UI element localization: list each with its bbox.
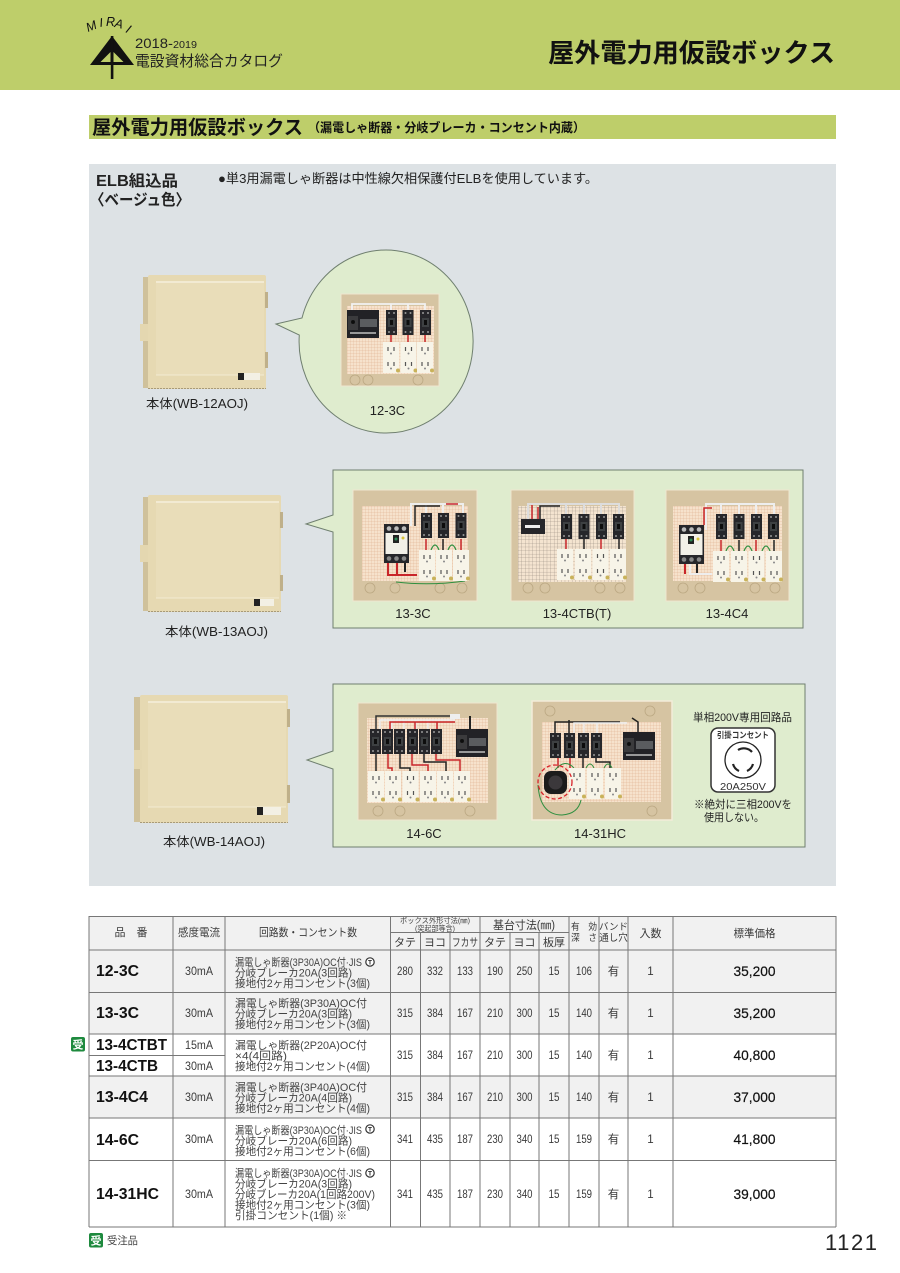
row: 13-4CTBT and 13-4CTB: 300 bbox=[516, 1050, 532, 1062]
row: 13-3C: 有 bbox=[608, 1006, 619, 1020]
icon: made-to-order mark: 受 bbox=[72, 1038, 84, 1052]
row: 14-31HC: 1 bbox=[647, 1189, 654, 1201]
row: 13-4C4: 13-4C4 bbox=[96, 1089, 148, 1106]
photo: 13-4C4 bbox=[666, 490, 789, 601]
row: 14-6C: 有 bbox=[608, 1132, 619, 1146]
row: 13-4CTBT and 13-4CTB: 15mA bbox=[185, 1040, 213, 1052]
row: 13-4CTBT and 13-4CTB: 接地付2ヶ用コンセント(4個) bbox=[235, 1060, 370, 1073]
row: 13-4CTBT and 13-4CTB: 210 bbox=[487, 1050, 503, 1062]
row: 13-4C4: 30mA bbox=[185, 1092, 213, 1104]
table header: 板厚 bbox=[543, 935, 565, 949]
body photo: WB-13AOJ bbox=[140, 495, 283, 612]
row: 14-6C: 分岐ブレーカ20A(6回路) bbox=[235, 1134, 352, 1148]
row: 13-4CTBT and 13-4CTB: 有 bbox=[608, 1048, 619, 1062]
warning note bbox=[694, 797, 792, 824]
panel: product area bbox=[89, 164, 836, 886]
table header: バンド bbox=[599, 922, 628, 933]
logo: MIRAI: MIRAI bbox=[84, 15, 134, 37]
row: 14-6C: 41,800 bbox=[734, 1131, 776, 1147]
table header bbox=[114, 915, 776, 949]
table header: 感度電流 bbox=[178, 925, 220, 939]
table header: タテ bbox=[484, 936, 506, 949]
row: 13-3C: 分岐ブレーカ20A(3回路) bbox=[235, 1006, 352, 1020]
row: 14-6C: 漏電しゃ断器(3P30A)OC付·JIS bbox=[235, 1124, 362, 1137]
table header: 通し穴 bbox=[599, 933, 628, 944]
row: 14-31HC: 341 bbox=[397, 1189, 413, 1201]
model label: 12-3C bbox=[370, 403, 405, 418]
row: 14-31HC: 435 bbox=[427, 1189, 443, 1201]
row shading bbox=[89, 916, 836, 1227]
row: 13-3C bbox=[96, 997, 776, 1031]
table header: 回路数・コンセント数 bbox=[259, 926, 357, 939]
photo: 12-3C bbox=[341, 294, 439, 386]
row: 13-4C4: 37,000 bbox=[734, 1089, 776, 1105]
panel heading: 〈ベージュ色〉 bbox=[90, 190, 190, 209]
icon: twist-lock outlet: 引掛コンセント bbox=[717, 730, 769, 740]
model label: 14-6C bbox=[406, 826, 442, 841]
photo: 14-6C bbox=[358, 703, 497, 820]
table header: ヨコ bbox=[424, 937, 446, 949]
row: 14-6C: 15 bbox=[548, 1134, 560, 1146]
body photo: WB-12AOJ bbox=[140, 275, 268, 389]
row: 14-31HC: 39,000 bbox=[734, 1186, 776, 1202]
caption: WB-12AOJ: 本体(WB-12AOJ) bbox=[146, 397, 248, 411]
callout panel: 14 series bbox=[307, 684, 805, 847]
row: 14-6C: T bbox=[368, 1126, 372, 1134]
row: 14-31HC: 15 bbox=[548, 1189, 560, 1201]
row: 13-3C: 35,200 bbox=[734, 1005, 776, 1021]
row: 14-6C bbox=[96, 1124, 776, 1158]
panel heading: ELB組込品 bbox=[96, 172, 178, 190]
table header: 基台寸法(㎜) bbox=[493, 918, 555, 932]
icon: made-to-order mark bbox=[71, 1037, 85, 1052]
model label: 13-4CTB(T) bbox=[543, 606, 611, 621]
row: 14-31HC: 分岐ブレーカ20A(1回路200V) bbox=[235, 1187, 375, 1201]
catalog name: 電設資材総合カタログ bbox=[135, 53, 283, 70]
row: 14-31HC: 340 bbox=[516, 1189, 532, 1201]
row: 12-3C: 1 bbox=[647, 966, 654, 978]
row: 14-6C: 159 bbox=[576, 1134, 592, 1146]
row: 13-3C: 140 bbox=[576, 1008, 592, 1020]
row: 12-3C: 133 bbox=[457, 966, 473, 978]
photo: 14-31HC bbox=[532, 701, 672, 820]
icon: twist-lock outlet bbox=[711, 728, 775, 793]
note: single-phase 200V: 単相200V専用回路品 bbox=[693, 710, 792, 724]
section heading bar bbox=[89, 115, 836, 139]
row: 12-3C: 12-3C bbox=[96, 963, 139, 980]
row: 14-31HC: 30mA bbox=[185, 1189, 213, 1201]
photo: 13-4CTB(T) bbox=[511, 490, 634, 601]
row: 13-3C: 315 bbox=[397, 1008, 413, 1020]
body photo: WB-14AOJ bbox=[134, 695, 290, 823]
row: 13-4C4 bbox=[96, 1081, 776, 1115]
legend: made-to-order bbox=[89, 1233, 138, 1248]
photo: 13-3C bbox=[353, 490, 477, 601]
spec table bbox=[71, 915, 836, 1227]
row: 13-4CTBT and 13-4CTB: 384 bbox=[427, 1050, 444, 1062]
row: 13-4CTBT and 13-4CTB: 13-4CTB bbox=[96, 1058, 158, 1075]
row: 13-4C4: 384 bbox=[427, 1092, 444, 1104]
row: 14-31HC: 有 bbox=[608, 1187, 619, 1201]
row: 13-3C: 300 bbox=[516, 1008, 532, 1020]
row: 14-31HC: 14-31HC bbox=[96, 1186, 159, 1203]
row: 12-3C: 250 bbox=[516, 966, 532, 978]
row: 13-4CTBT and 13-4CTB: 30mA bbox=[185, 1061, 213, 1073]
table header: (突起部等含) bbox=[415, 923, 455, 933]
row: 12-3C: 15 bbox=[548, 966, 560, 978]
row: 14-6C: 435 bbox=[427, 1134, 443, 1146]
model label: 13-3C bbox=[395, 606, 431, 621]
row: 12-3C: 分岐ブレーカ20A(3回路) bbox=[235, 966, 352, 980]
row: 12-3C: 接地付2ヶ用コンセント(3個) bbox=[235, 977, 370, 990]
note: ●単3用漏電しゃ断器は中性線欠相保護付ELBを使用しています。 bbox=[218, 171, 598, 186]
table header: 品 番 bbox=[114, 926, 148, 939]
table header: 標準価格 bbox=[734, 926, 776, 940]
row: 14-6C: 341 bbox=[397, 1134, 413, 1146]
caption: WB-13AOJ: 本体(WB-13AOJ) bbox=[165, 625, 268, 639]
row: 13-4C4: 300 bbox=[516, 1092, 532, 1104]
row: 14-6C: 230 bbox=[487, 1134, 503, 1146]
table header: タテ bbox=[394, 936, 416, 949]
section heading bar: 屋外電力用仮設ボックス bbox=[92, 117, 303, 139]
row: 13-4C4: 315 bbox=[397, 1092, 413, 1104]
page number: 1121 bbox=[825, 1230, 877, 1255]
row: 12-3C bbox=[96, 956, 776, 990]
row: 12-3C: 30mA bbox=[185, 966, 213, 978]
row: 13-4C4: 167 bbox=[457, 1092, 473, 1104]
row: 14-31HC: 漏電しゃ断器(3P30A)OC付·JIS bbox=[235, 1167, 362, 1180]
row: 14-31HC bbox=[96, 1167, 776, 1222]
row: 12-3C: 有 bbox=[608, 964, 619, 978]
row: 13-3C: 13-3C bbox=[96, 1005, 139, 1022]
row: 14-31HC: 230 bbox=[487, 1189, 503, 1201]
row: 13-4CTBT and 13-4CTB: 315 bbox=[397, 1050, 413, 1062]
row: 13-3C: 210 bbox=[487, 1008, 503, 1020]
row: 14-31HC: 分岐ブレーカ20A(3回路) bbox=[235, 1176, 352, 1190]
section heading bar: （漏電しゃ断器・分岐ブレーカ・コンセント内蔵） bbox=[308, 120, 585, 135]
row: 13-3C: 15 bbox=[548, 1008, 560, 1020]
logo: MIRAI bbox=[84, 15, 134, 79]
page title: 屋外電力用仮設ボックス bbox=[548, 38, 835, 68]
row: 14-6C: 340 bbox=[516, 1134, 532, 1146]
row: 13-4CTBT and 13-4CTB: 漏電しゃ断器(2P20A)OC付 bbox=[235, 1039, 367, 1052]
table header: ボックス外形寸法(㎜) bbox=[400, 915, 470, 925]
warning note: 使用しない。 bbox=[704, 811, 764, 824]
row: 14-31HC: 159 bbox=[576, 1189, 592, 1201]
row: 13-4C4: 1 bbox=[647, 1092, 654, 1104]
row: 13-3C: 漏電しゃ断器(3P30A)OC付 bbox=[235, 997, 367, 1010]
row: 13-3C: 接地付2ヶ用コンセント(3個) bbox=[235, 1018, 370, 1031]
row: 12-3C: 280 bbox=[397, 966, 413, 978]
row: 13-4C4: 有 bbox=[608, 1090, 619, 1104]
header band bbox=[0, 0, 900, 90]
row: 14-31HC: 接地付2ヶ用コンセント(3個) bbox=[235, 1198, 370, 1212]
icon: twist-lock outlet: 20A250V bbox=[720, 782, 766, 793]
warning note: ※絶対に三相200Vを bbox=[694, 797, 792, 811]
row: 13-4C4: 15 bbox=[548, 1092, 560, 1104]
table header: フカサ bbox=[452, 936, 478, 949]
row: 14-6C: 接地付2ヶ用コンセント(6個) bbox=[235, 1145, 370, 1158]
row: 14-31HC: 187 bbox=[457, 1189, 473, 1201]
row: 14-6C: 1 bbox=[647, 1134, 654, 1146]
row: 12-3C: 332 bbox=[427, 966, 443, 978]
row: 13-4CTBT and 13-4CTB bbox=[96, 1037, 776, 1075]
row: 12-3C: 106 bbox=[576, 966, 592, 978]
row: 12-3C: 190 bbox=[487, 966, 503, 978]
row: 12-3C: T bbox=[368, 960, 372, 966]
panel heading bbox=[90, 172, 190, 209]
catalog year: 2018- bbox=[135, 35, 173, 51]
row: 13-3C: 167 bbox=[457, 1008, 473, 1020]
row: 14-6C: 30mA bbox=[185, 1134, 213, 1146]
row: 13-4C4: 漏電しゃ断器(3P40A)OC付 bbox=[235, 1081, 367, 1094]
row: 14-6C: 14-6C bbox=[96, 1132, 139, 1149]
row: 13-4C4: 接地付2ヶ用コンセント(4個) bbox=[235, 1102, 370, 1115]
model label: 14-31HC bbox=[574, 826, 626, 841]
table header: 入数 bbox=[640, 927, 662, 940]
caption: WB-14AOJ: 本体(WB-14AOJ) bbox=[163, 835, 265, 849]
row: 12-3C: 漏電しゃ断器(3P30A)OC付·JIS bbox=[235, 956, 362, 969]
legend: made-to-order: 受 bbox=[90, 1234, 102, 1248]
row: 13-4CTBT and 13-4CTB: 13-4CTBT bbox=[96, 1037, 168, 1054]
table header: 深 さ bbox=[571, 933, 597, 944]
row: 13-4C4: 210 bbox=[487, 1092, 503, 1104]
callout: 12-3C bbox=[276, 250, 473, 433]
legend: made-to-order: 受注品 bbox=[107, 1234, 138, 1247]
row: 14-6C: 187 bbox=[457, 1134, 473, 1146]
row: 13-3C: 384 bbox=[427, 1008, 444, 1020]
row: 13-3C: 30mA bbox=[185, 1008, 213, 1020]
row: 14-31HC: T bbox=[368, 1170, 372, 1178]
row: 13-4C4: 分岐ブレーカ20A(4回路) bbox=[235, 1090, 352, 1104]
row: 12-3C: 35,200 bbox=[734, 963, 776, 979]
row: 13-4CTBT and 13-4CTB: 167 bbox=[457, 1050, 473, 1062]
model label: 13-4C4 bbox=[706, 606, 748, 621]
row: 13-4CTBT and 13-4CTB: 1 bbox=[647, 1050, 654, 1062]
table header: ヨコ bbox=[514, 937, 536, 949]
row: 13-4C4: 140 bbox=[576, 1092, 592, 1104]
callout panel: 13 series bbox=[306, 470, 803, 628]
table header: 有 効 bbox=[571, 921, 597, 933]
table grid bbox=[89, 916, 836, 1227]
row: 13-4CTBT and 13-4CTB: 40,800 bbox=[734, 1047, 776, 1063]
row: 13-4CTBT and 13-4CTB: ×4(4回路) bbox=[235, 1050, 287, 1062]
catalog year end: 2019 bbox=[173, 39, 197, 51]
row: 14-31HC: 引掛コンセント(1個) ※ bbox=[235, 1208, 347, 1222]
row: 13-4CTBT and 13-4CTB: 140 bbox=[576, 1050, 592, 1062]
row: 13-3C: 1 bbox=[647, 1008, 654, 1020]
row: 13-4CTBT and 13-4CTB: 15 bbox=[548, 1050, 560, 1062]
